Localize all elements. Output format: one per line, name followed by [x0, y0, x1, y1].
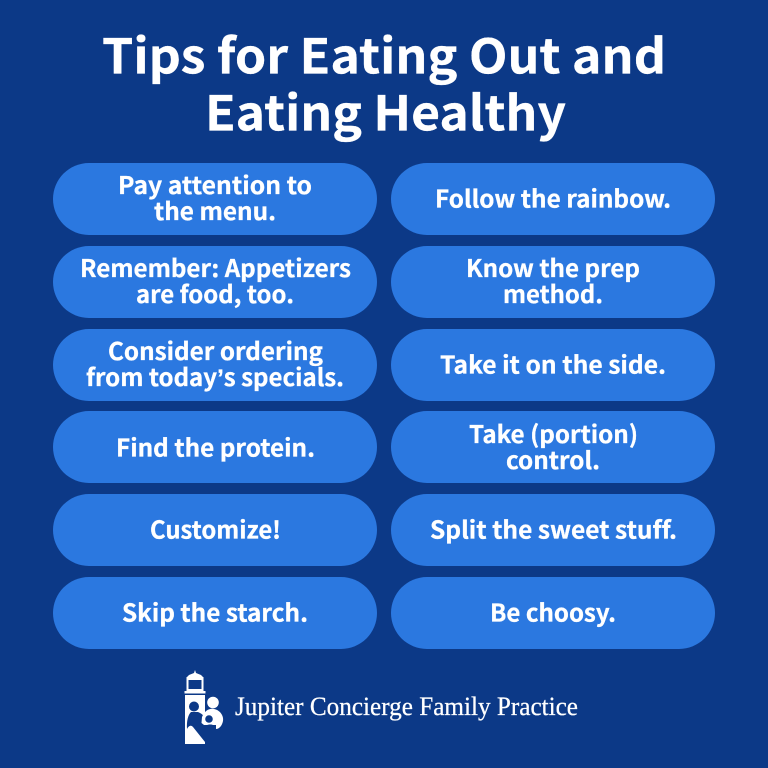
tip: Be choosy: [391, 577, 715, 649]
tip: Take portion control: [391, 411, 715, 483]
tip: Follow the rainbow: Follow the rainbow.: [435, 180, 671, 214]
tip: Pay attention to the menu: the menu.: [154, 192, 276, 227]
tip: Remember appetizers are food: are food, too.: [136, 275, 294, 310]
tip: Be choosy: Be choosy.: [490, 594, 616, 628]
tip: Split the sweet stuff: [391, 494, 715, 566]
tip: Take portion control: control.: [506, 441, 600, 476]
tip: Know the prep method: Know the prep: [466, 249, 640, 284]
tip: Customize: Customize!: [150, 510, 281, 546]
logo text: Jupiter Concierge Family Practice: [235, 692, 578, 721]
tip: Consider ordering from specials: [53, 329, 377, 401]
tip: Remember appetizers are food: [53, 246, 377, 318]
tip: Customize: [53, 494, 377, 566]
tip: Skip the starch: Skip the starch.: [122, 594, 308, 628]
tip: Follow the rainbow: [391, 163, 715, 235]
tip: Pay attention to the menu: [53, 163, 377, 235]
logo icon: lighthouse with family: [184, 670, 223, 745]
tip: Skip the starch: [53, 577, 377, 649]
tip: Know the prep method: [391, 246, 715, 318]
tip: Take it on the side: Take it on the side.: [440, 346, 666, 380]
tip: Find the protein: [53, 411, 377, 483]
tip: Consider ordering from specials: Consider ordering: [108, 332, 323, 367]
tip: Pay attention to the menu: Pay attention to: [118, 166, 312, 201]
tip: Find the protein: Find the protein.: [116, 428, 315, 464]
tip: Take portion control: Take (portion): [469, 415, 638, 450]
tip: Remember appetizers are food: Remember: Appetizers: [80, 249, 351, 284]
title: [102, 18, 666, 144]
tip: Split the sweet stuff: Split the sweet stuff.: [430, 510, 677, 546]
tip: Know the prep method: method.: [503, 275, 603, 310]
tip: Consider ordering from specials: from today’s specials.: [86, 358, 344, 393]
tip: Take it on the side: [391, 329, 715, 401]
title: Eating Healthy: [205, 74, 566, 144]
title: Tips for Eating Out and: [102, 18, 666, 88]
